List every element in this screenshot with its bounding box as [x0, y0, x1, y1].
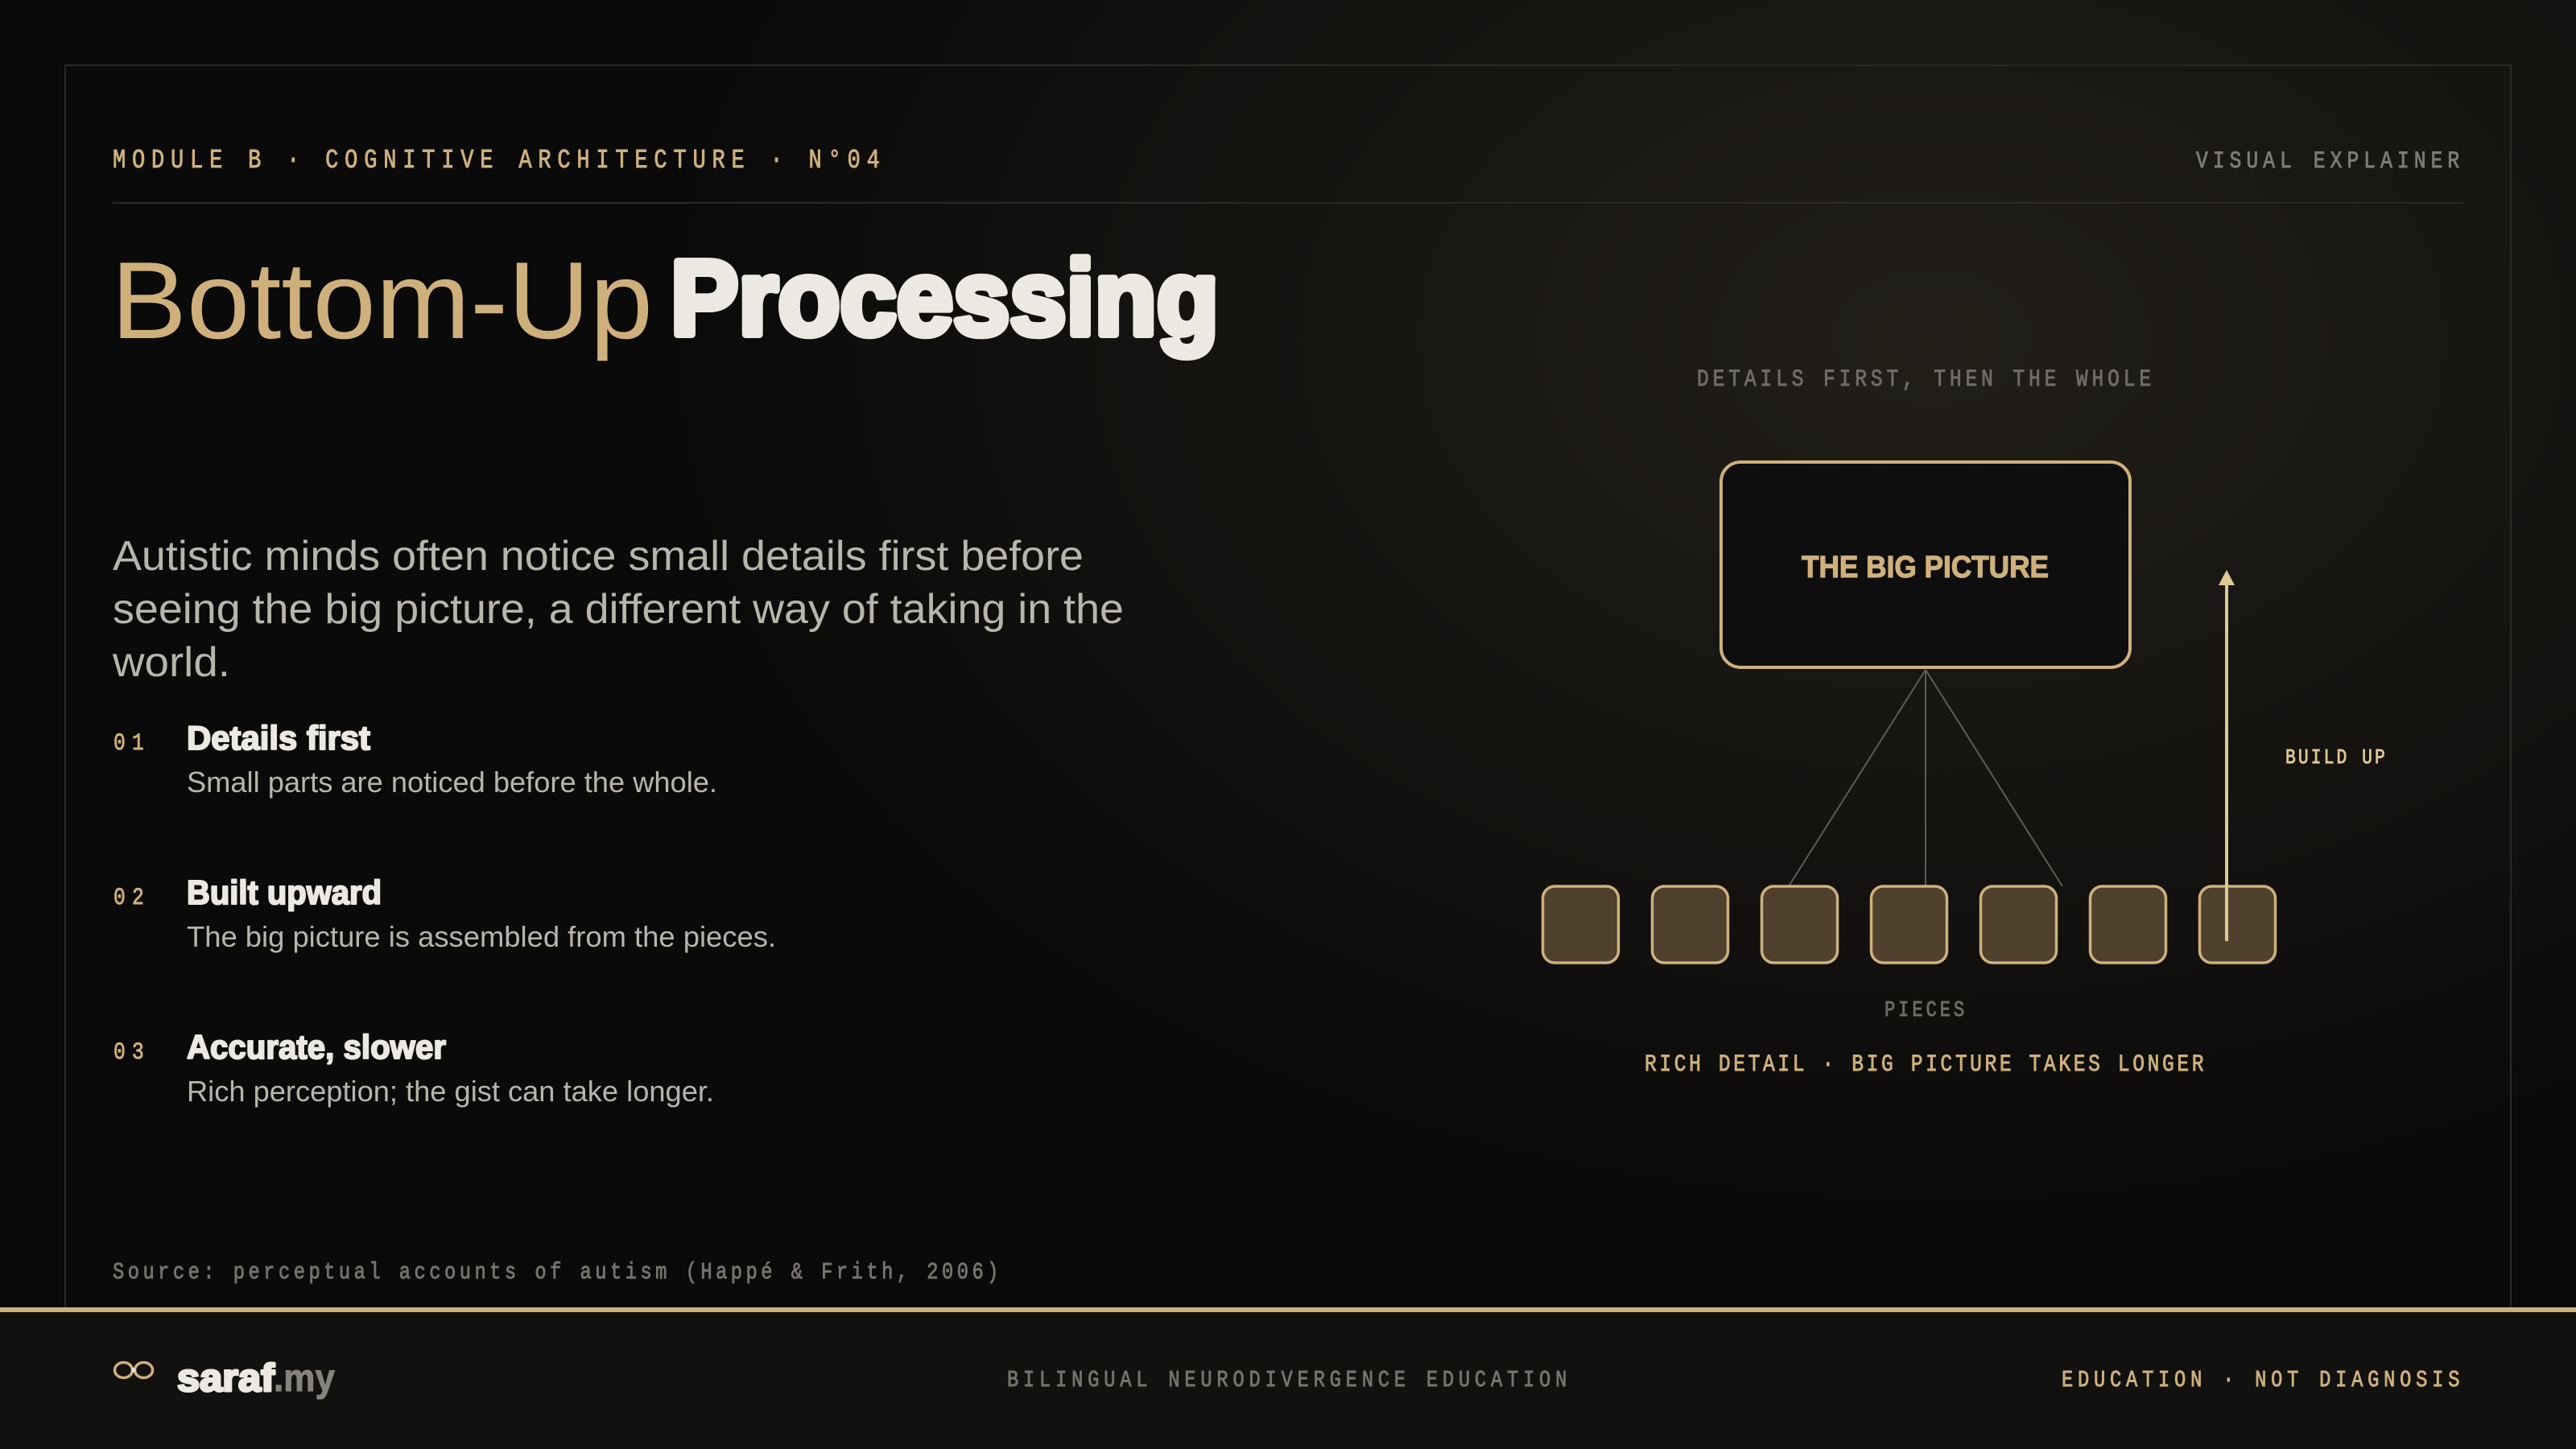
list item 01: Small parts are noticed before the whole. — [187, 766, 717, 799]
list item 01: 01 — [114, 730, 144, 758]
logo wordmark: .my — [274, 1357, 335, 1400]
arrow: build up — [2219, 570, 2235, 941]
pieces row — [1542, 886, 2275, 963]
header tag: VISUAL EXPLAINER — [2196, 148, 2459, 175]
diagram: bottom-up processing — [1542, 366, 2385, 1079]
list item 01: Details first — [187, 719, 370, 757]
title — [111, 238, 1219, 361]
list item 01 — [114, 719, 717, 799]
icon: infinity logo — [114, 1362, 153, 1378]
lede paragraph: seeing the big picture, a different way of taking in the — [113, 586, 1124, 633]
source note: Source: perceptual accounts of autism (Happé & Frith, 2006) — [113, 1259, 998, 1286]
lede paragraph: world. — [112, 639, 230, 686]
list item 02: 02 — [114, 885, 144, 912]
footer disclaimer: EDUCATION · NOT DIAGNOSIS — [2062, 1367, 2459, 1393]
header eyebrow: MODULE B · COGNITIVE ARCHITECTURE · N°04 — [113, 147, 880, 176]
arrow label: BUILD UP — [2285, 746, 2385, 770]
title: Processing — [671, 238, 1219, 357]
list item 02 — [114, 873, 776, 953]
list item 03: Rich perception; the gist can take longer. — [187, 1075, 714, 1108]
list item 03: Accurate, slower — [187, 1028, 446, 1066]
logo wordmark: saraf — [177, 1357, 275, 1400]
list item 02: Built upward — [187, 873, 382, 911]
diagram heading: DETAILS FIRST, THEN THE WHOLE — [1697, 366, 2151, 394]
pieces label: PIECES — [1885, 998, 1964, 1023]
header divider — [113, 202, 2463, 204]
footer — [0, 1307, 2576, 1449]
list item 03 — [114, 1028, 714, 1108]
footer centre text: BILINGUAL NEURODIVERGENCE EDUCATION — [1007, 1367, 1567, 1393]
lede paragraph — [112, 533, 1124, 686]
connector lines — [1789, 670, 2062, 886]
list item 03: 03 — [114, 1039, 144, 1067]
big picture box: THE BIG PICTURE — [1802, 551, 2049, 584]
title: Bottom-Up — [111, 239, 653, 361]
list item 02: The big picture is assembled from the pieces. — [187, 920, 776, 953]
big picture box — [1721, 462, 2130, 667]
lede paragraph: Autistic minds often notice small details first before — [113, 533, 1084, 580]
caption: RICH DETAIL · BIG PICTURE TAKES LONGER — [1645, 1051, 2204, 1079]
